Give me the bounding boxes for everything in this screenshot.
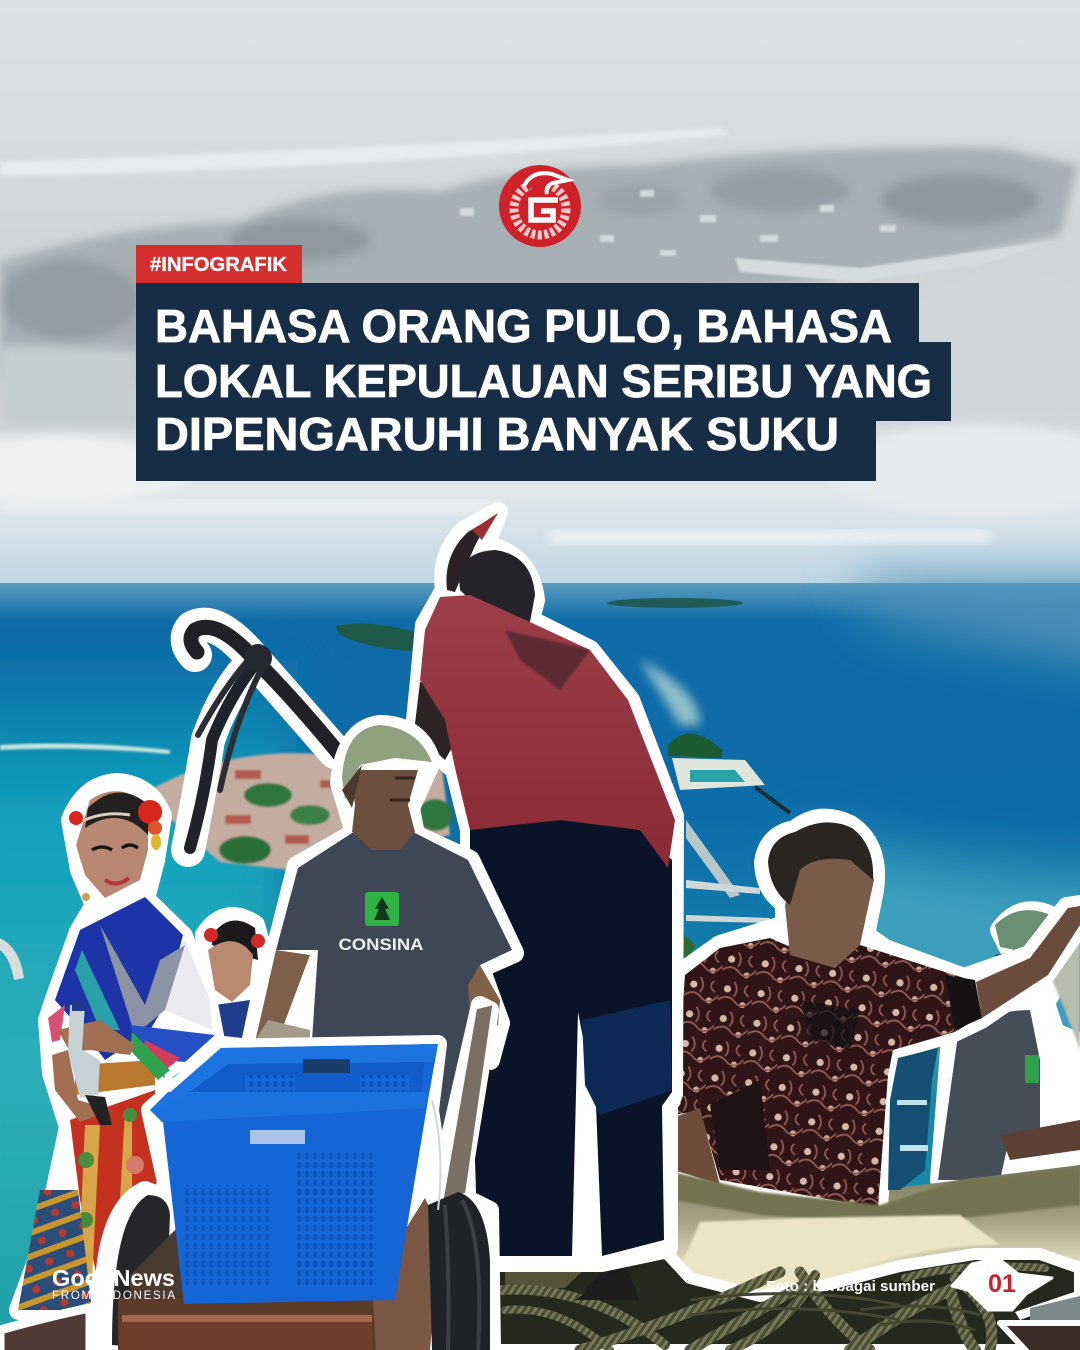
songket lower cloth [18,1190,92,1310]
hashtag tag [136,245,302,283]
neck and head [350,770,418,850]
photo credit: Foto : berbagai sumber [766,1278,935,1295]
front seaweed [673,1168,1080,1225]
page-number badge: 01 [952,1258,1052,1310]
hole of sea between arm and man [888,1048,938,1190]
black hook with dangling rope [188,625,340,850]
background: sea [0,580,1080,1350]
blue bodice [55,897,183,1060]
belt [75,1060,155,1095]
cart outline [103,1005,492,1350]
brown boat corner, bottom left [0,1308,90,1350]
bottom-right white band and boat [1015,1290,1080,1320]
flowers [138,800,162,824]
round red logo [499,165,581,247]
publisher logo: GoodNews from Indonesia: FROM INDONESIA [52,1290,175,1302]
cart with blue basket [103,1005,492,1350]
handle [448,1010,488,1195]
publisher logo: GoodNews from Indonesia: GoodNews [52,1265,175,1291]
basket [150,1044,438,1304]
ropes at the bottom [490,1240,1080,1350]
arms [255,950,310,1042]
red shirt [420,595,675,868]
man in red shirt seen from behind [414,512,675,1262]
arm [976,906,1080,1018]
wooden deck [118,1298,380,1350]
title block [136,283,951,481]
dancer outline [19,783,214,1315]
snorkel shape [446,514,498,592]
dress [675,938,978,1208]
man outline [255,725,514,1060]
left wheel [112,1195,170,1350]
black anchor on ropes [590,1240,672,1290]
arms [58,1020,135,1055]
title block: BAHASA ORANG PULO, BAHASA [155,300,892,352]
white sleeve [155,940,212,1030]
second dancer behind [204,917,265,1040]
title block: DIPENGARUHI BANYAK SUKU [155,408,839,460]
pants [470,818,672,1256]
man with hat and grey Consina shirt [252,725,514,1130]
arm [414,682,462,760]
water bottle [68,1005,100,1098]
head [76,791,148,898]
background: hazy sky and distant island [0,0,1080,590]
woman in batik dress with seaweed [672,819,1080,1295]
head [785,840,874,968]
title block: LOKAL KEPULAUAN SERIBU YANG [155,355,932,407]
hashtag tag: #INFOGRAFIK [150,254,288,276]
publisher logo: GoodNews from Indonesia [52,1265,175,1302]
islands, village and pier [0,598,790,980]
shirt [276,833,512,1130]
dancer in blue and red costume [18,783,215,1315]
man with hat and grey Consina shirt: CONSINA [338,935,424,954]
page-number badge: 01: 01 [988,1270,1016,1298]
head [459,550,535,622]
consina logo [365,892,399,926]
ruffles [130,1025,215,1078]
red skirt [70,1090,158,1290]
right wheel [428,1192,490,1350]
second man in the background, right [938,910,1080,1180]
silhouette outline [415,512,674,1262]
seaweed band [672,1165,1080,1295]
woman silhouette [673,819,1080,1206]
wood wedge [372,1198,440,1350]
